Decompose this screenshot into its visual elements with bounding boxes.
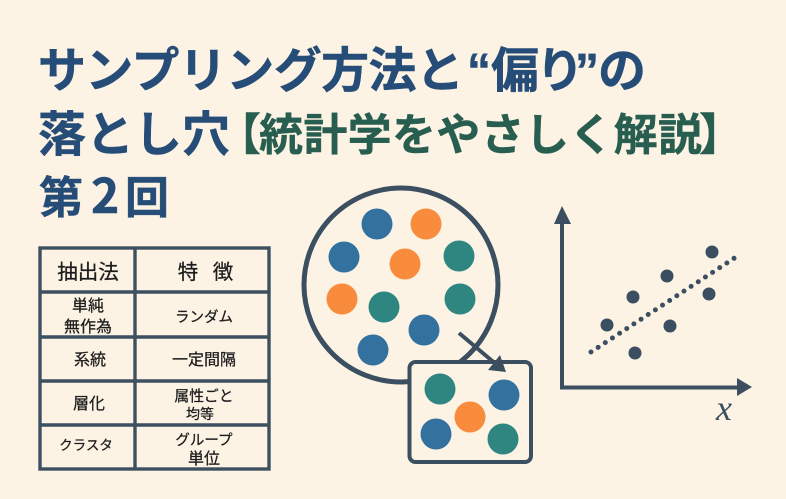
y axis arrowhead	[554, 206, 571, 224]
table header: 徴	[213, 255, 233, 285]
table row: systematic	[74, 346, 236, 370]
population circle	[304, 188, 498, 382]
title line 2: subtitle: 統計学をやさしく解説	[259, 99, 702, 163]
title line 1: ”	[575, 45, 599, 98]
scatter plot	[554, 206, 752, 428]
x axis label: x	[715, 388, 732, 428]
box outline	[410, 362, 531, 462]
table row: cluster: グループ	[175, 429, 233, 450]
table row: cluster: 単位	[188, 445, 220, 469]
population dots	[326, 208, 476, 366]
table row: simple random	[64, 292, 233, 337]
title line 2: subtitle: 】	[699, 99, 743, 163]
table header	[57, 255, 233, 285]
title line 3: part number: 第	[39, 162, 83, 226]
table row: cluster	[59, 429, 233, 469]
title line 3: part number	[39, 157, 169, 227]
table header: 特	[178, 255, 198, 285]
table row: systematic: 一定間隔	[172, 346, 236, 370]
title line 1: 偏	[491, 31, 539, 101]
sample dots	[420, 374, 520, 454]
table row: simple random: ランダム	[175, 306, 233, 327]
table row: stratified: 層化	[73, 390, 105, 414]
table row: cluster: クラスタ	[59, 434, 113, 454]
sample box	[410, 362, 531, 462]
title line 1: サンプリング方法と	[38, 31, 464, 101]
title line 1: の	[598, 31, 646, 101]
title line 3: part number: 回	[125, 162, 169, 226]
title line 2: subtitle: 【	[217, 99, 261, 163]
title line 1: り	[536, 31, 584, 101]
trend line	[591, 258, 734, 352]
axes	[562, 220, 740, 388]
circle outline	[304, 188, 498, 382]
title line 3: part number: 2	[91, 157, 119, 227]
title line 1: “	[467, 45, 491, 98]
arrow: population to sample	[459, 333, 506, 372]
table: sampling methods	[40, 248, 269, 469]
table row: stratified: 属性ごと	[174, 385, 234, 406]
x axis arrowhead	[737, 378, 752, 396]
table header: 抽出法	[57, 255, 119, 285]
table row: simple random: 単純	[72, 292, 104, 316]
table row: stratified: 均等	[186, 404, 214, 424]
table row: systematic: 系統	[74, 346, 106, 370]
scatter points	[600, 246, 718, 360]
table row: simple random: 無作為	[64, 313, 112, 337]
title	[38, 31, 743, 227]
table grid	[40, 248, 269, 469]
title line 2: main: 落とし穴	[38, 95, 230, 165]
table row: stratified	[73, 385, 234, 424]
